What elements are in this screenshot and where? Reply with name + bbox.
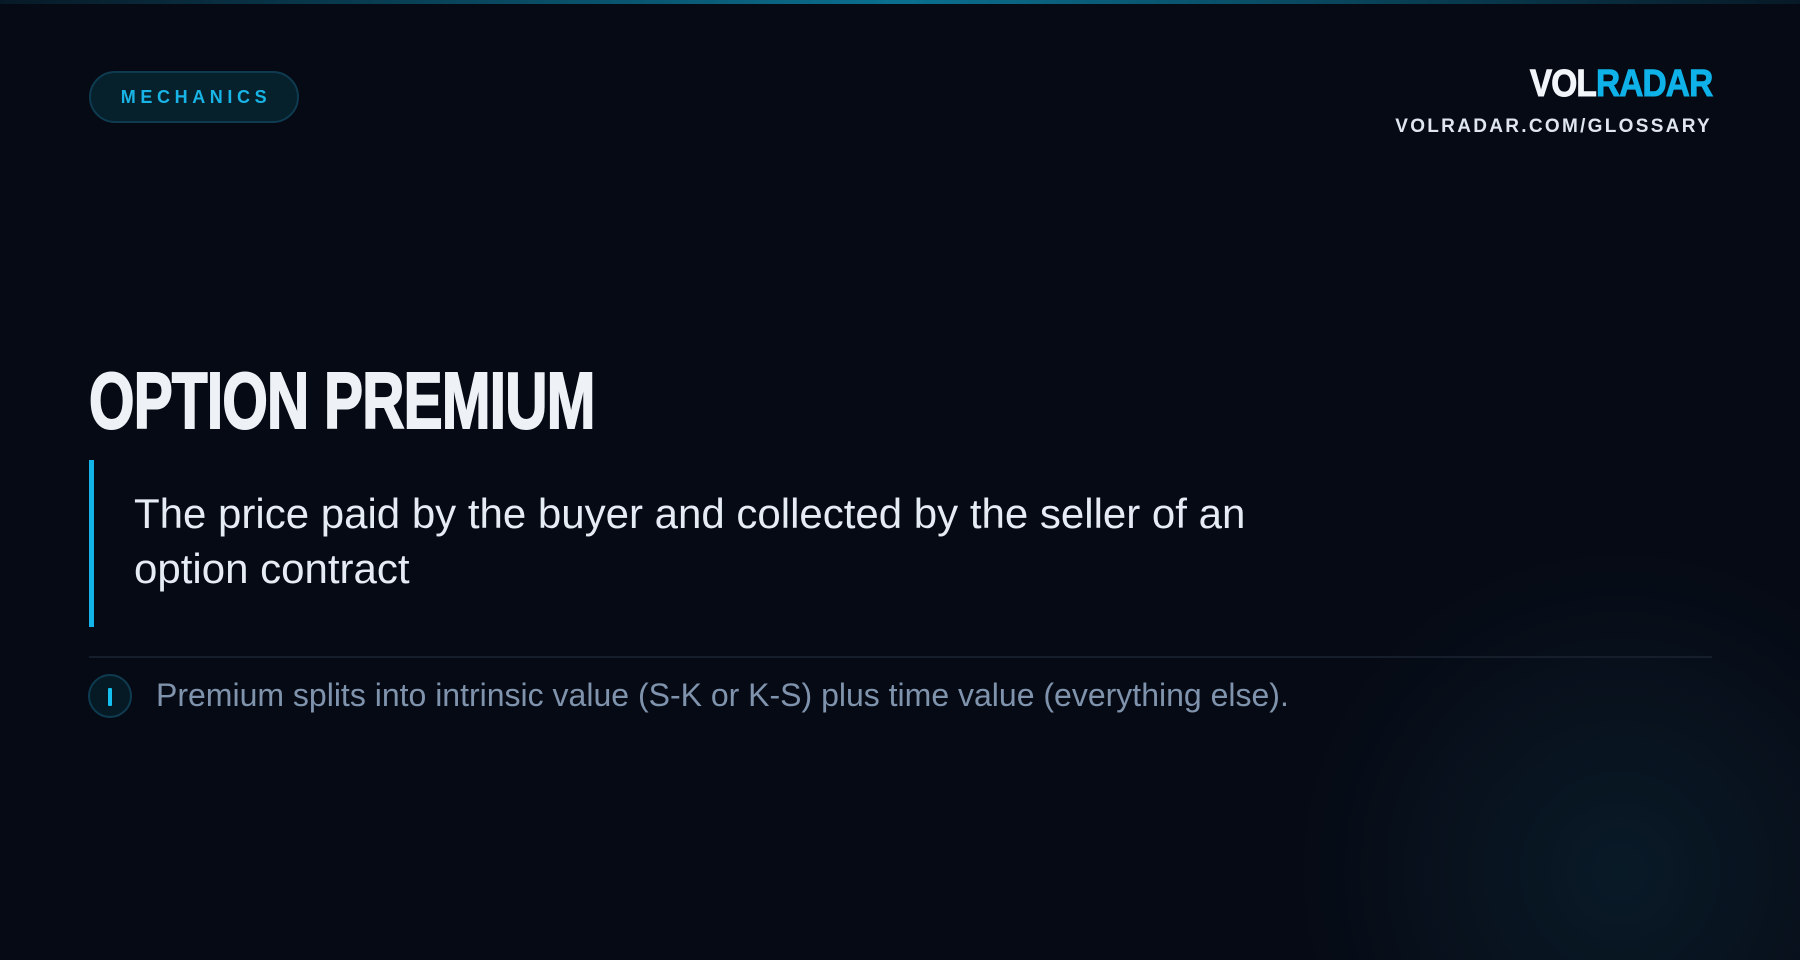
info note xyxy=(88,674,1289,718)
definition block xyxy=(89,460,1339,627)
category pill: MECHANICS xyxy=(121,86,271,106)
category pill xyxy=(89,71,299,123)
brand logo: VOLRADAR xyxy=(1530,63,1712,105)
definition text: option contract xyxy=(134,545,410,592)
url: VOLRADAR.COM/GLOSSARY xyxy=(1395,116,1712,137)
icon: info xyxy=(88,674,132,718)
title: OPTION PREMIUM xyxy=(89,356,595,445)
note text: Premium splits into intrinsic value (S-K or K-S) plus time value (everything else). xyxy=(156,677,1289,713)
definition text: The price paid by the buyer and collected by the seller of an xyxy=(134,490,1245,537)
definition text xyxy=(134,490,1245,592)
